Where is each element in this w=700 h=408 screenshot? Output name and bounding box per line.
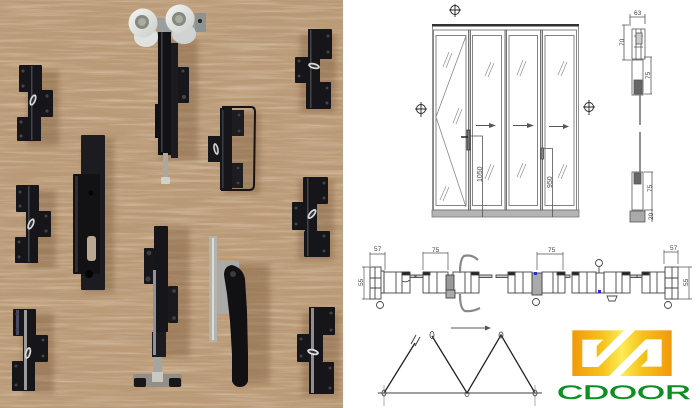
glass bars — [410, 275, 642, 278]
logo: CDOOR — [557, 330, 691, 404]
logo mark — [572, 330, 672, 376]
door leaves — [434, 30, 576, 210]
dimension labels: plan: 75 — [432, 247, 440, 254]
hinge pieces with rings — [532, 273, 542, 295]
long lock plate — [73, 135, 105, 290]
section markers — [415, 4, 595, 117]
top roller carriage — [128, 4, 206, 184]
window handle with lock strip — [209, 236, 248, 387]
hinge: bottom right — [297, 307, 335, 394]
dimension labels: plan: 55 — [683, 278, 690, 286]
panel: horizontal plan drawing — [362, 250, 692, 311]
left jamb — [370, 267, 381, 299]
hinge: top left — [17, 65, 53, 141]
dimension labels: plan: 57 — [670, 245, 678, 252]
handle hinge — [208, 107, 255, 190]
dimension labels: section: 70 — [619, 38, 626, 46]
direction arrows — [476, 126, 567, 127]
dimension labels: section: 63 — [634, 10, 642, 17]
door handles and height dimensions — [467, 130, 470, 150]
dimension labels: plan — [358, 245, 690, 286]
dimension labels: plan: 57 — [374, 246, 382, 253]
handle — [460, 256, 480, 311]
blue markers — [534, 272, 601, 293]
dimension labels: elevation: 1050 — [477, 166, 484, 182]
hinge: bottom left — [12, 309, 48, 391]
panel: door elevation drawing — [415, 4, 595, 217]
shadows — [22, 34, 340, 396]
plan dimensions — [362, 250, 692, 299]
bottom roller carriage — [133, 226, 182, 387]
lock piece — [446, 275, 454, 290]
dimension labels: section: 75 — [647, 184, 654, 192]
right jamb — [665, 267, 678, 299]
hinge: middle left — [15, 185, 51, 263]
logo wordmark: CDOOR — [557, 383, 691, 404]
frame — [432, 24, 578, 216]
dimension labels: section: 75 — [645, 71, 652, 79]
dimension labels: section — [619, 10, 655, 220]
hinge: top right — [295, 29, 332, 109]
panel: hardware photo on wood — [0, 0, 343, 408]
fold triangle — [436, 36, 466, 207]
dimension labels: plan: 75 — [548, 247, 556, 254]
dimension labels: plan: 55 — [358, 278, 365, 286]
profiles — [384, 272, 665, 293]
hinge: middle right — [292, 177, 330, 257]
dimension labels: section: 20 — [648, 212, 655, 220]
glass hatches — [440, 52, 567, 201]
panel: folding diagram — [378, 326, 542, 406]
dimension labels: elevation — [477, 166, 554, 188]
panel: vertical section drawing — [622, 14, 653, 222]
dimension labels: elevation: 950 — [547, 176, 554, 188]
